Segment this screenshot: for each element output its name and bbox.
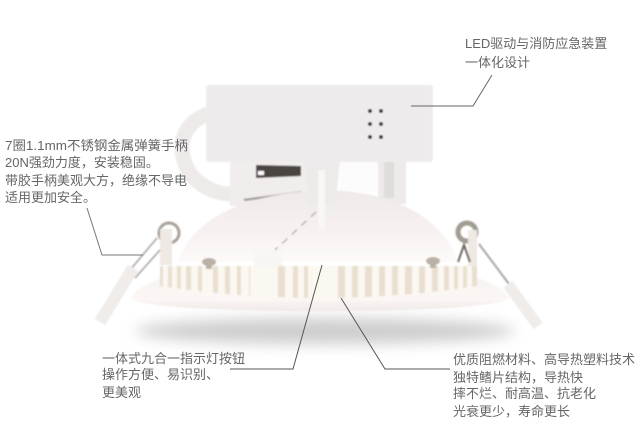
text: indicator button — [102, 351, 245, 400]
text: indicator button: 操作方便、易识别、 — [102, 367, 219, 382]
text: indicator button: 一体式九合一指示灯按钮 — [102, 351, 245, 366]
text: materials: 优质阻燃材料、高导热塑料技术 — [453, 352, 635, 367]
base plate — [130, 272, 510, 311]
driver box — [206, 85, 433, 162]
text: driver — [465, 36, 607, 70]
text: driver: 一体化设计 — [465, 55, 530, 70]
text: spring handle: 带胶手柄美观大方，绝缘不导电 — [5, 173, 187, 188]
text: materials — [453, 352, 635, 419]
metal bracket — [243, 165, 301, 201]
text: spring handle: 适用更加安全。 — [5, 190, 96, 205]
text: spring handle — [5, 138, 188, 205]
spring handle loop — [182, 114, 232, 194]
text: spring handle: 7圈1.1mm不锈钢金属弹簧手柄 — [5, 138, 188, 153]
callout line: spring handle — [87, 208, 143, 255]
callout line: fins — [341, 298, 450, 369]
text: spring handle: 20N强劲力度，安装稳固。 — [5, 155, 159, 170]
text: materials: 摔不烂、耐高温、抗老化 — [453, 386, 596, 401]
heat sink fin ring — [160, 266, 477, 298]
left spring clip — [100, 223, 179, 322]
text: driver: LED驱动与消防应急装置 — [465, 36, 607, 51]
dome housing — [178, 190, 458, 262]
text: materials: 独特鳍片结构，导热快 — [453, 370, 583, 385]
text: materials: 光衰更少，寿命更长 — [453, 404, 570, 419]
mounting post right — [340, 160, 406, 204]
vent holes — [368, 109, 383, 139]
screws — [202, 257, 440, 269]
callout line: driver — [411, 75, 492, 106]
downlight product illustration — [100, 85, 538, 344]
centre connector — [254, 162, 340, 274]
callout line: indicator button — [230, 265, 322, 369]
floor shadow — [135, 318, 515, 344]
text: indicator button: 更美观 — [102, 385, 141, 400]
mounting post left — [230, 160, 306, 206]
right spring clip — [458, 223, 538, 326]
